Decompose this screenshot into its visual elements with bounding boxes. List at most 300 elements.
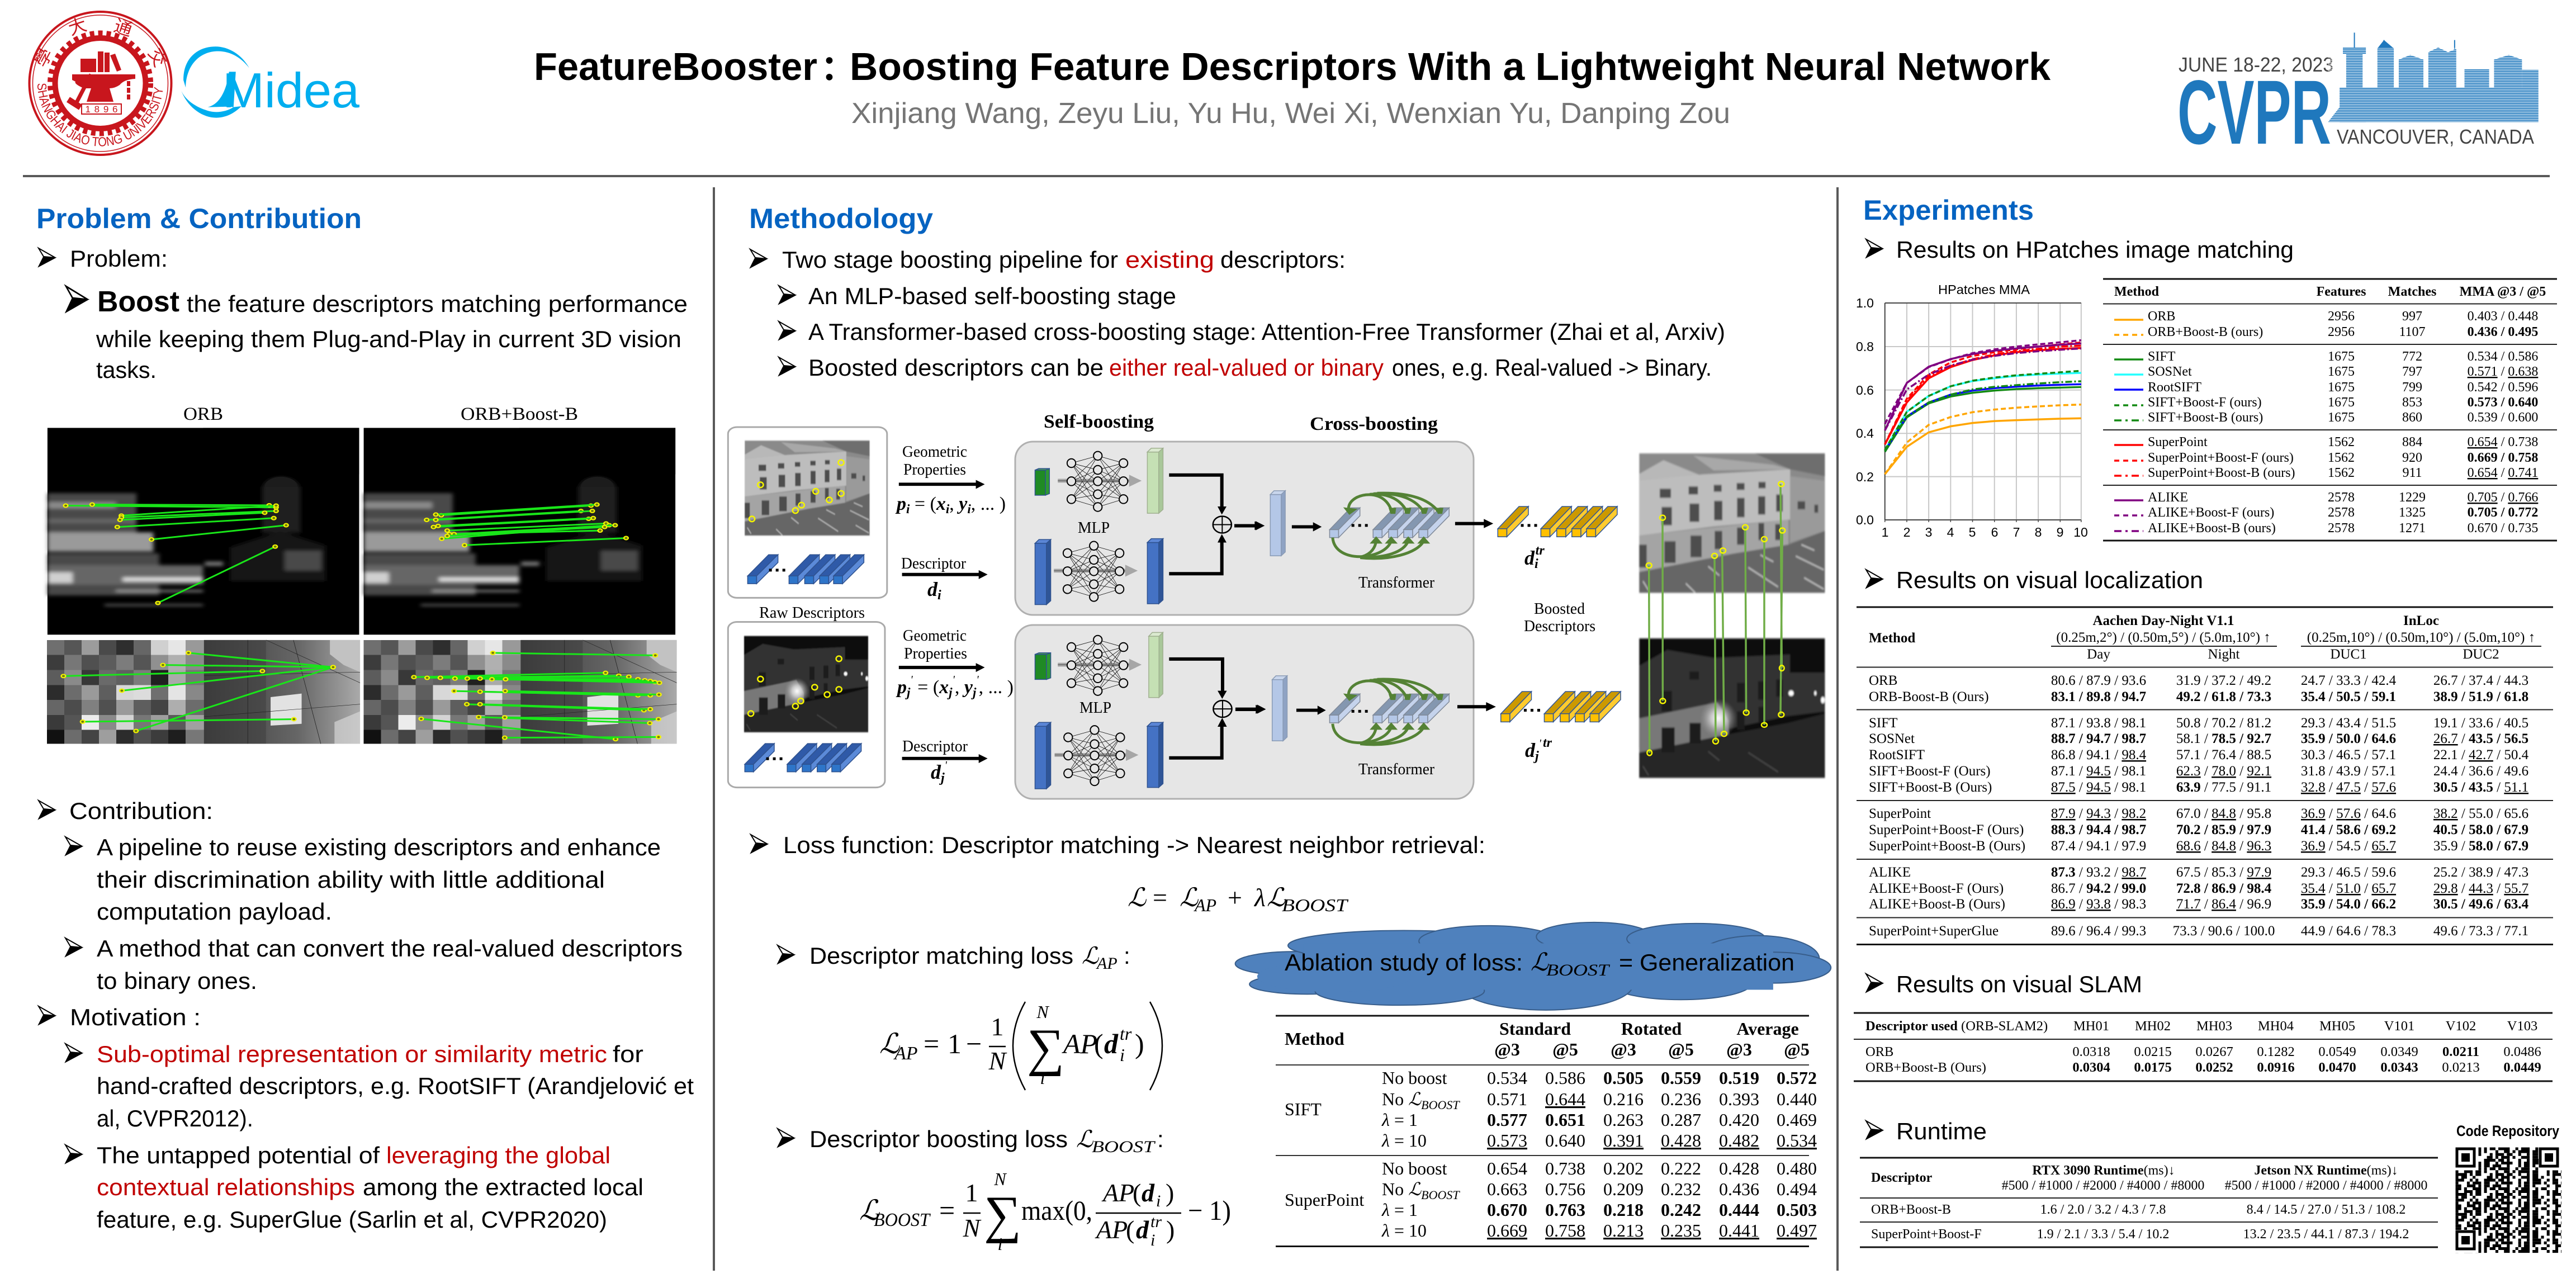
table: visual SLAM results: 0.0213 <box>2442 1060 2480 1075</box>
table: visual SLAM results: MH01 <box>2073 1019 2109 1034</box>
dots <box>1352 525 1542 711</box>
table: visual localization results: 73.3 / 90.6 / 100.0 <box>2173 924 2275 939</box>
table: visual localization results: InLoc <box>2403 613 2439 628</box>
table: visual localization results: 88.3 / 94.4 / 98.7 <box>2051 822 2146 837</box>
equation: total loss: ℒ <box>1267 883 1286 912</box>
table: ablation study: 0.216 <box>1603 1089 1644 1109</box>
table: visual SLAM results: V101 <box>2384 1019 2414 1034</box>
contribution item 2: A method that can convert the real-valued descriptors <box>97 935 683 962</box>
table: HPatches results: SIFT+Boost-B (ours) <box>2148 410 2263 425</box>
equation: boost loss: i <box>998 1234 1002 1254</box>
diagram labels: d <box>1525 739 1535 761</box>
diagram labels: MLP <box>1079 699 1111 717</box>
equation: boost loss: AP <box>1101 1178 1134 1207</box>
table: ablation study: 0.670 <box>1487 1200 1527 1220</box>
table: visual localization results: 87.4 / 94.1 / 97.9 <box>2051 839 2146 854</box>
table: HPatches results: 920 <box>2402 451 2422 465</box>
label: ORB+Boost-B: ORB+Boost-B <box>461 404 578 424</box>
table: visual localization results: 83.1 / 89.8 / 94.7 <box>2051 689 2146 704</box>
panel: Methodology <box>728 203 1831 1254</box>
table: ablation study <box>1276 1016 1817 1247</box>
equation: AP loss: = <box>924 1028 939 1059</box>
chart: HPatches MMA <box>1856 282 2088 539</box>
table: runtime: #500 / #1000 / #2000 / #4000 / #8000 <box>2002 1178 2204 1193</box>
equation: AP loss: ∑ <box>1027 1019 1064 1077</box>
table: visual localization results: DUC2 <box>2463 647 2499 662</box>
contribution item 1: their discrimination ability with little additional <box>97 866 605 893</box>
table: HPatches results: ALIKE+Boost-F (ours) <box>2148 505 2274 520</box>
bullet: Problem <box>39 248 55 267</box>
contribution item 1: A pipeline to reuse existing descriptors and enhance <box>97 834 661 860</box>
bullet: Boost <box>66 286 88 312</box>
table: HPatches results: SuperPoint <box>2148 435 2208 449</box>
table: ablation study: 0.235 <box>1661 1220 1701 1240</box>
bullet: descriptor boosting loss: Descriptor boosting loss <box>809 1126 1068 1152</box>
equation: AP loss: ( <box>1094 1028 1104 1059</box>
table: visual SLAM results <box>1854 1013 2553 1081</box>
chart: HPatches MMA: 0.0 <box>1856 513 1874 527</box>
equation: boost loss: AP <box>1095 1215 1128 1244</box>
boosted descriptors (orange) <box>1498 506 1621 722</box>
diagram: cross-boosting stage and matching images <box>1234 491 1621 745</box>
equation: total loss: BOOST <box>1282 895 1349 915</box>
equation: AP loss: AP <box>1062 1028 1097 1059</box>
pipeline summary bullets: ones, e.g. Real-valued -> Binary. <box>1392 354 1712 381</box>
table: HPatches results: 853 <box>2402 395 2422 410</box>
table: ablation study: No ℒ <box>1382 1179 1421 1199</box>
chart: HPatches MMA: 4 <box>1947 525 1954 539</box>
diagram labels: ' <box>945 759 948 771</box>
chart: HPatches MMA: 6 <box>1991 525 1998 539</box>
table: HPatches results: ORB <box>2148 309 2175 324</box>
table: HPatches results: 0.539 / 0.600 <box>2468 410 2538 425</box>
table: HPatches results: 0.573 / 0.640 <box>2468 395 2538 410</box>
table: HPatches results: 0.534 / 0.586 <box>2468 349 2538 364</box>
table: visual localization results: SOSNet <box>1869 731 1915 746</box>
logo: Midea <box>181 46 359 118</box>
equation: boost loss: d <box>1142 1178 1155 1207</box>
diagram labels: j <box>1533 749 1539 764</box>
table: visual localization results: 86.8 / 94.1 / 98.4 <box>2051 747 2146 763</box>
table: visual localization results: 35.4 / 50.5 / 59.1 <box>2301 689 2396 704</box>
diagram labels: j <box>970 685 977 699</box>
diagram labels: j <box>905 685 911 699</box>
table: visual localization results: 26.7 / 43.5 / 56.5 <box>2433 731 2528 746</box>
table: ablation study: 0.505 <box>1603 1068 1644 1088</box>
table: HPatches results: 2956 <box>2328 309 2355 324</box>
table: HPatches results: 1675 <box>2328 410 2355 425</box>
table: ablation study: 0.534 <box>1487 1068 1527 1088</box>
diagram labels: tr <box>1536 543 1545 558</box>
table: visual localization results: 36.9 / 57.6 / 64.6 <box>2301 806 2396 821</box>
callout: ablation study cloud: Ablation study of loss: <box>1285 949 1523 976</box>
contribution item 2 <box>65 935 683 994</box>
MLP networks <box>1054 452 1142 785</box>
table: runtime: 1.6 / 2.0 / 3.2 / 4.3 / 7.8 <box>2040 1202 2166 1217</box>
diagram labels: j <box>946 685 953 699</box>
table: ablation study: 0.494 <box>1777 1179 1817 1199</box>
equation: total loss: AP <box>1194 895 1216 915</box>
table: runtime: SuperPoint+Boost-F <box>1871 1227 1982 1242</box>
table: HPatches results: 2956 <box>2328 325 2355 339</box>
pipeline summary bullets: Two stage boosting pipeline for <box>782 247 1118 273</box>
motivation item 2 <box>65 1142 643 1233</box>
table: visual localization results: 29.8 / 44.3 / 55.7 <box>2433 881 2528 896</box>
text: Boost statement: tasks. <box>96 357 157 383</box>
table: visual localization results: 62.3 / 78.0 / 92.1 <box>2176 764 2271 779</box>
pipeline summary bullets: Boosted descriptors can be <box>808 354 1104 381</box>
diagram labels: y <box>959 494 967 514</box>
table: HPatches results: 1562 <box>2328 466 2355 480</box>
equation: total loss: ℒ <box>1180 883 1199 912</box>
table: visual localization results: 41.4 / 58.6 / 69.2 <box>2301 822 2396 837</box>
logo: Shanghai Jiao Tong University seal: SHANGHAI JIAO TONG UNIVERSITY <box>37 84 163 146</box>
chart: HPatches MMA: 0.2 <box>1856 470 1874 484</box>
bullet: descriptor matching loss: ℒ <box>1082 944 1099 969</box>
table: HPatches results: Method <box>2114 285 2160 299</box>
text: Boost statement: Boost <box>97 286 179 318</box>
table: HPatches results: SuperPoint+Boost-F (ours) <box>2148 451 2294 465</box>
table: ablation study: 0.469 <box>1777 1110 1817 1130</box>
table: visual localization results: 63.9 / 77.5 / 91.1 <box>2176 780 2271 795</box>
column divider left <box>713 187 715 1271</box>
table: ablation study: 0.480 <box>1777 1158 1817 1178</box>
table: HPatches results: 2578 <box>2328 505 2355 520</box>
table: HPatches results: ALIKE <box>2148 490 2188 505</box>
table: visual localization results: ORB <box>1869 673 1897 688</box>
title: Boosting Feature Descriptors With a Lightweight Neural Network <box>850 45 2051 88</box>
table: runtime <box>1860 1158 2438 1247</box>
motivation item 2: The untapped potential of <box>97 1142 380 1168</box>
diagram labels: p <box>897 677 907 698</box>
diagram labels: p <box>897 494 906 514</box>
diagram labels: , ... ) <box>971 494 1006 514</box>
diagram labels: ' <box>1539 737 1542 750</box>
table: HPatches results: 0.571 / 0.638 <box>2468 364 2538 379</box>
table: ablation study: 0.669 <box>1487 1220 1527 1240</box>
table: visual localization results: ORB-Boost-B (Ours) <box>1869 689 1989 704</box>
diagram labels: i <box>967 502 971 516</box>
diagram labels: , <box>949 494 959 514</box>
table: ablation study: No boost <box>1382 1158 1447 1178</box>
table: HPatches results: SIFT <box>2148 349 2176 364</box>
table: ablation study: 0.640 <box>1545 1130 1585 1150</box>
table: visual localization results: 88.7 / 94.7 / 98.7 <box>2051 731 2146 746</box>
table: visual localization results: 38.2 / 55.0 / 65.6 <box>2433 806 2528 821</box>
equation: boost loss: = <box>939 1195 955 1226</box>
diagram labels: , <box>955 677 964 698</box>
diagram labels: d <box>1524 547 1535 569</box>
text: Motivation: Motivation : <box>70 1004 201 1030</box>
table: visual localization results: 35.4 / 51.0 / 65.7 <box>2301 881 2396 896</box>
table: visual SLAM results: 0.0215 <box>2134 1044 2172 1059</box>
table: ablation study: 0.213 <box>1603 1220 1644 1240</box>
table: ablation study: 0.428 <box>1719 1158 1759 1178</box>
table: ablation study: 0.577 <box>1487 1110 1527 1130</box>
bullet: descriptor boosting loss: ℒ <box>1076 1127 1093 1153</box>
equation: boost loss: ) <box>1166 1178 1174 1207</box>
table: visual SLAM results: 0.0470 <box>2318 1060 2356 1075</box>
diagram labels: i <box>1535 557 1538 571</box>
equation: boost loss: − 1) <box>1188 1195 1231 1226</box>
diagram labels: x <box>939 677 949 698</box>
table: HPatches results: 1325 <box>2399 505 2426 520</box>
chart: HPatches MMA: 3 <box>1925 525 1932 539</box>
table: ablation study: @5 <box>1668 1039 1694 1059</box>
table: visual localization results: SIFT <box>1869 716 1897 731</box>
bullet: descriptor matching loss: Descriptor matching loss <box>809 943 1073 969</box>
subheading: visual localization: Results on visual localization <box>1896 567 2203 593</box>
equation: boost loss: ℒ <box>859 1195 880 1226</box>
authors: Xinjiang Wang, Zeyu Liu, Yu Hu, Wei Xi, Wenxian Yu, Danping Zou <box>851 97 1730 130</box>
feature bars <box>1035 448 1163 789</box>
motivation item 2: contextual relationships <box>97 1174 355 1200</box>
table: HPatches results: SOSNet <box>2148 364 2192 379</box>
table: visual localization results: DUC1 <box>2330 647 2367 662</box>
table: HPatches results: ORB+Boost-B (ours) <box>2148 325 2263 339</box>
table: ablation study: @5 <box>1784 1039 1810 1059</box>
table: visual localization results: SuperPoint+Boost-B (Ours) <box>1869 839 2025 854</box>
table: visual localization results: 38.9 / 51.9 / 61.8 <box>2433 689 2528 704</box>
equation: AP loss: ℒ <box>879 1028 900 1059</box>
table: ablation study: 0.738 <box>1545 1158 1585 1178</box>
diagram labels: Raw Descriptors <box>759 604 865 622</box>
table: ablation study: 0.644 <box>1545 1089 1585 1109</box>
logo: Shanghai Jiao Tong University seal <box>28 11 172 156</box>
table: ablation study: 0.756 <box>1545 1179 1585 1199</box>
bullet: descriptor matching loss: AP <box>1096 954 1117 973</box>
chart: HPatches MMA: 1 <box>1882 525 1888 539</box>
diagram labels: i <box>906 502 910 516</box>
table: visual SLAM results: 0.0549 <box>2318 1044 2356 1059</box>
table: visual localization results: 25.2 / 38.9 / 47.3 <box>2433 865 2528 880</box>
table: HPatches results: ALIKE+Boost-B (ours) <box>2148 521 2276 536</box>
pipeline summary bullets: An MLP-based self-boosting stage <box>808 283 1176 309</box>
heading: Problem & Contribution <box>36 203 362 234</box>
equation: total loss: ℒ <box>1128 883 1147 912</box>
table: visual localization results: (0.25m,10°) / (0.50m,10°) / (5.0m,10°) ↑ <box>2307 630 2535 645</box>
figure: day and night match images <box>1639 453 1825 778</box>
table: visual localization results: (0.25m,2°) / (0.50m,5°) / (5.0m,10°) ↑ <box>2056 630 2271 645</box>
table: ablation study: λ = 10 <box>1381 1130 1427 1150</box>
table: visual localization results: 35.9 / 50.0 / 64.6 <box>2301 731 2396 746</box>
table: visual localization results: 87.5 / 94.5 / 98.1 <box>2051 780 2146 795</box>
table: ablation study: 0.571 <box>1487 1089 1527 1109</box>
table: ablation study: 0.663 <box>1487 1179 1527 1199</box>
equation: boost loss: i <box>1150 1231 1155 1249</box>
logo: Midea: Midea <box>222 63 359 118</box>
title: ： <box>821 49 855 88</box>
equation: boost loss: ) <box>1166 1215 1175 1244</box>
table: visual localization results: SuperPoint <box>1869 806 1931 821</box>
diagram labels: Geometric <box>903 627 967 645</box>
bullet: descriptor matching loss <box>778 943 1130 973</box>
motivation item 2: feature, e.g. SuperGlue (Sarlin et al, CVPR2020) <box>97 1206 607 1233</box>
table: ablation study: 0.758 <box>1545 1220 1585 1240</box>
table: visual SLAM results: V103 <box>2507 1019 2537 1034</box>
table: ablation study: 0.440 <box>1777 1089 1817 1109</box>
logo: Shanghai Jiao Tong University seal: 通 <box>112 15 135 40</box>
contribution item 2: to binary ones. <box>97 968 257 994</box>
transformer tokens <box>1329 508 1449 723</box>
table: HPatches results: 772 <box>2402 349 2422 364</box>
table: visual localization results: 31.9 / 37.2 / 49.2 <box>2176 673 2271 688</box>
table: ablation study: @3 <box>1494 1039 1520 1059</box>
table: visual localization results: SuperPoint+SuperGlue <box>1869 924 1999 939</box>
table: HPatches results: 1562 <box>2328 451 2355 465</box>
motivation item 1: Sub-optimal representation or similarity metric <box>97 1041 607 1067</box>
table: visual localization results: 86.9 / 93.8 / 98.3 <box>2051 897 2146 912</box>
table: ablation study: λ = 10 <box>1381 1220 1427 1240</box>
equation: boost loss: N <box>993 1169 1007 1189</box>
equation: AP loss: d <box>1104 1028 1119 1059</box>
table: ablation study: No ℒ <box>1382 1089 1421 1109</box>
pipeline summary bullets: descriptors: <box>1220 247 1346 273</box>
table: ablation study: Standard <box>1499 1019 1571 1039</box>
motivation item 2: among the extracted local <box>363 1174 643 1200</box>
table: visual SLAM results: ORB <box>1865 1044 1893 1059</box>
heading: Methodology <box>749 203 933 234</box>
table: ablation study: 0.202 <box>1603 1158 1644 1178</box>
table: visual localization results: 24.7 / 33.3 / 42.4 <box>2301 673 2397 688</box>
table: visual SLAM results: 0.0267 <box>2195 1044 2233 1059</box>
diagram: raw descriptors and self-boosting stage <box>728 427 1266 789</box>
equation: boost loss: max(0, <box>1021 1195 1092 1226</box>
table: ablation study: No boost <box>1382 1068 1447 1088</box>
table: visual localization results: ALIKE <box>1869 865 1911 880</box>
table: visual SLAM results: 0.0343 <box>2380 1060 2418 1075</box>
diagram labels: y <box>964 677 973 698</box>
table: visual localization results: 30.3 / 46.5 / 57.1 <box>2301 747 2396 763</box>
diagram labels: Transformer <box>1358 761 1435 778</box>
table: ablation study: 0.534 <box>1777 1130 1817 1150</box>
logo: CVPR 2023 Vancouver: CVPR <box>2177 61 2331 163</box>
text: Boost statement: while keeping them Plug-and-Play in current 3D vision <box>96 326 681 352</box>
table: ablation study: 0.763 <box>1545 1200 1585 1220</box>
diagram labels: Properties <box>904 645 967 662</box>
pipeline summary bullets: either real-valued or binary <box>1109 354 1384 381</box>
equation: AP loss: i <box>1040 1068 1045 1088</box>
table: ablation study: SIFT <box>1285 1099 1322 1119</box>
callout: ablation study cloud: = Generalization <box>1619 949 1794 976</box>
table: visual localization results: 24.4 / 36.6 / 49.6 <box>2433 764 2528 779</box>
table: visual SLAM results: Descriptor used (ORB-SLAM2) <box>1865 1019 2048 1034</box>
table: visual SLAM results: 0.0211 <box>2442 1044 2479 1059</box>
table: visual SLAM results: 0.0486 <box>2503 1044 2541 1059</box>
table: visual SLAM results: 0.0318 <box>2072 1044 2110 1059</box>
equation: AP loss: i <box>1120 1045 1125 1065</box>
table: ablation study: Rotated <box>1621 1019 1682 1039</box>
table: visual SLAM results: 0.0252 <box>2195 1060 2233 1075</box>
equation: boost loss: 1 <box>965 1178 978 1207</box>
diagram labels: Self-boosting <box>1044 411 1154 432</box>
table: HPatches results: RootSIFT <box>2148 380 2201 395</box>
diagram labels: Descriptor <box>901 555 967 572</box>
equation: AP loss: 1 <box>991 1012 1004 1041</box>
table: ablation study: 0.287 <box>1661 1110 1701 1130</box>
subheading: HPatches: Results on HPatches image matching <box>1896 236 2294 263</box>
logo: CVPR 2023 Vancouver: VANCOUVER, CANADA <box>2337 125 2534 148</box>
table: visual localization results: 40.5 / 58.0 / 67.9 <box>2433 822 2528 837</box>
text: Boost statement <box>96 286 688 383</box>
table: runtime: RTX 3090 Runtime(ms)↓ <box>2032 1163 2175 1178</box>
table: ablation study: 0.242 <box>1661 1200 1701 1220</box>
raw descriptor box i <box>728 427 887 598</box>
equation: AP loss: tr <box>1120 1024 1132 1044</box>
table: ablation study: λ = 1 <box>1381 1110 1418 1130</box>
table: HPatches results: 997 <box>2402 309 2422 324</box>
table: ablation study: 0.651 <box>1545 1110 1585 1130</box>
equation: boost loss <box>859 1169 1231 1254</box>
table: ablation study: 0.428 <box>1661 1130 1701 1150</box>
panel: Problem & Contribution <box>36 203 694 1233</box>
table: visual localization results: Day <box>2087 647 2110 662</box>
equation: total loss: λ <box>1253 883 1266 912</box>
diagram labels: Cross-boosting <box>1310 414 1438 434</box>
table: visual localization results: 31.8 / 43.9 / 57.1 <box>2301 764 2396 779</box>
table: ablation study: 0.393 <box>1719 1089 1759 1109</box>
table: visual localization results: ALIKE+Boost-F (Ours) <box>1869 881 2004 896</box>
chart: HPatches MMA: 0.6 <box>1856 383 1874 397</box>
chart: HPatches MMA: 10 <box>2073 525 2088 539</box>
panel: grey boosting box, image i <box>1015 442 1474 615</box>
equation: AP loss <box>879 1002 1162 1090</box>
legend line samples <box>2114 320 2143 531</box>
table: visual localization results: 30.5 / 43.5 / 51.1 <box>2433 780 2528 795</box>
table: HPatches results: 860 <box>2402 410 2422 425</box>
table: visual SLAM results: 0.0304 <box>2072 1060 2110 1075</box>
equation: boost loss: BOOST <box>874 1210 931 1230</box>
table: visual localization results: 72.8 / 86.9 / 98.4 <box>2176 881 2272 896</box>
diagram labels: ' <box>910 674 913 686</box>
subheading: visual SLAM: Results on visual SLAM <box>1896 971 2142 997</box>
QR code <box>2455 1147 2561 1253</box>
chart: HPatches MMA: 7 <box>2013 525 2020 539</box>
arrows: inputs to self-boosting <box>899 480 988 763</box>
header rule <box>23 175 2550 177</box>
table: visual localization results: RootSIFT <box>1869 747 1925 763</box>
table: visual localization results: 67.5 / 85.3 / 97.9 <box>2176 865 2271 880</box>
diagram labels: , ... ) <box>979 677 1014 698</box>
table: HPatches results: 1675 <box>2328 364 2355 379</box>
table: HPatches results: 911 <box>2402 466 2422 480</box>
panel: grey boosting box, image j <box>1015 625 1474 799</box>
motivation item 1: al, CVPR2012). <box>97 1105 253 1131</box>
table: HPatches results: 2578 <box>2328 521 2355 536</box>
table: visual localization results: 29.3 / 43.4 / 51.5 <box>2301 716 2396 731</box>
diagram labels: = ( <box>910 494 936 514</box>
table: visual localization results: 57.1 / 76.4 / 88.5 <box>2176 747 2271 763</box>
table: visual localization results: 32.8 / 47.5 / 57.6 <box>2301 780 2396 795</box>
table: ablation study: BOOST <box>1421 1098 1460 1112</box>
table: runtime: Jetson NX Runtime(ms)↓ <box>2254 1163 2398 1178</box>
table: visual localization results: SIFT+Boost-B (Ours) <box>1869 780 1992 795</box>
table: visual localization results: 87.1 / 94.5 / 98.1 <box>2051 764 2146 779</box>
table: visual SLAM results: 0.0449 <box>2503 1060 2541 1075</box>
equation: AP loss: − <box>966 1028 982 1059</box>
callout: ablation study cloud <box>1235 922 1831 1010</box>
diagram labels: d <box>931 761 941 783</box>
table: visual SLAM results: MH04 <box>2258 1019 2294 1034</box>
table: HPatches results: 884 <box>2402 435 2422 449</box>
table: visual localization results: 87.9 / 94.3 / 98.2 <box>2051 806 2146 821</box>
table: HPatches results: 2578 <box>2328 490 2355 505</box>
table: visual SLAM results: 0.1282 <box>2257 1044 2295 1059</box>
table: ablation study: 0.586 <box>1545 1068 1585 1088</box>
table: visual localization results: 67.0 / 84.8 / 95.8 <box>2176 806 2271 821</box>
table: HPatches results: 1675 <box>2328 395 2355 410</box>
diagram labels: Descriptors <box>1524 618 1595 635</box>
